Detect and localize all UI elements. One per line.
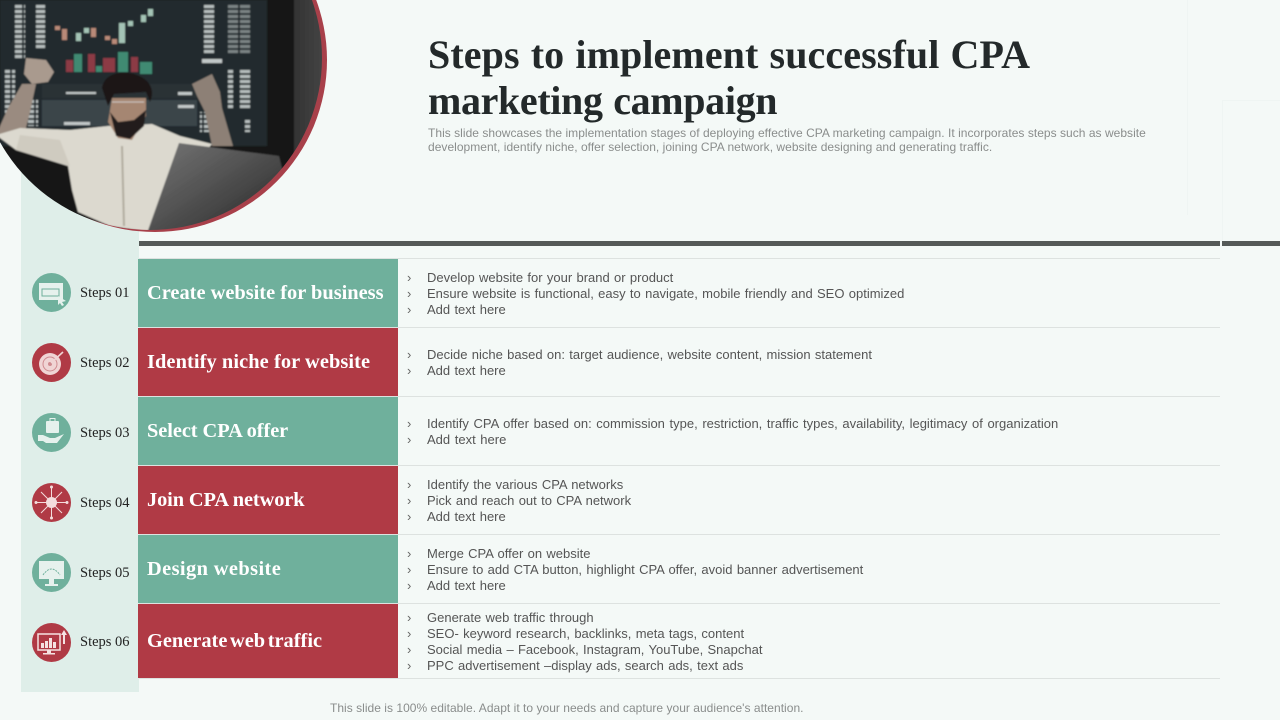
row 4 heading (138, 466, 398, 534)
row 3 bullets: Identify CPA offer based on: commission type, restriction, traffic types, availability, legitimacy of organization (427, 416, 1058, 431)
row 4 bullets: Pick and reach out to CPA network (427, 493, 631, 508)
icon: target (32, 343, 71, 382)
arms (0, 84, 36, 136)
subtitle description: development, identify niche, offer selection, joining CPA network, website designing and generating traffic. (428, 140, 992, 154)
row 5 bullets (408, 546, 864, 593)
title: marketing campaign (428, 78, 777, 122)
row 1 heading (138, 259, 398, 327)
photo: man celebrating in front of trading screens (0, 0, 327, 232)
subtitle description: This slide showcases the implementation stages of deploying effective CPA marketing campaign. It incorporates steps such as website (428, 126, 1146, 140)
row 1 bullets: Develop website for your brand or product (427, 270, 673, 285)
icon: traffic chart monitor (32, 623, 71, 662)
row 3 bullets: Add text here (427, 432, 506, 447)
row 2 heading: Identify niche for website (147, 350, 370, 372)
row 5: design website (139, 535, 1220, 604)
header rule right segment (1222, 241, 1280, 246)
row 3 bullets (408, 416, 1058, 447)
shirt (0, 124, 212, 232)
subtitle description (428, 126, 1146, 154)
row 2 bullets: Add text here (427, 363, 506, 378)
row 5 bullets: Ensure to add CTA button, highlight CPA offer, avoid banner advertisement (427, 562, 863, 577)
label: Steps 01: Steps 01 (80, 285, 130, 301)
row 1 bullets: Add text here (427, 302, 506, 317)
row 6 heading (138, 604, 398, 678)
header rule (139, 241, 1220, 246)
icon: website cursor (32, 273, 71, 312)
footer note: This slide is 100% editable. Adapt it to your needs and capture your audience's attention. (330, 701, 804, 715)
row 2 heading (138, 328, 398, 396)
row 4 heading: Join CPA network (147, 488, 304, 510)
label: Steps 06: Steps 06 (80, 634, 130, 650)
row 4: join network (139, 466, 1220, 535)
row 6: generate traffic (139, 604, 1220, 679)
title: Steps to implement successful CPA (428, 32, 1030, 77)
row 6 bullets: Social media – Facebook, Instagram, YouTube, Snapchat (427, 642, 762, 657)
row 3 heading: Select CPA offer (147, 420, 288, 442)
row 5 heading (138, 535, 398, 603)
row 1 bullets: Ensure website is functional, easy to navigate, mobile friendly and SEO optimized (427, 286, 904, 301)
row 4 bullets (408, 477, 632, 524)
row 4 bullets: Add text here (427, 509, 506, 524)
label: Steps 02: Steps 02 (80, 355, 130, 371)
row 4 bullets: Identify the various CPA networks (427, 477, 623, 492)
icon: hand with briefcase (32, 413, 71, 452)
row 6 bullets: Generate web traffic through (427, 610, 594, 625)
top row line (139, 258, 1220, 259)
row 5 heading: Design website (147, 558, 281, 580)
head (108, 98, 146, 140)
row 6 bullets (408, 610, 762, 673)
row 6 heading: Generate web traffic (147, 630, 322, 652)
row 6 bullets: PPC advertisement –display ads, search ads, text ads (427, 658, 743, 673)
row 3 heading (138, 397, 398, 465)
icon: monitor design (32, 553, 71, 592)
label: Steps 05: Steps 05 (80, 565, 130, 581)
label: Steps 03: Steps 03 (80, 425, 130, 441)
title (428, 32, 1030, 122)
row 6 bullets: SEO- keyword research, backlinks, meta tags, content (427, 626, 744, 641)
row 5 bullets: Add text here (427, 578, 506, 593)
row 3: select offer (139, 397, 1220, 466)
row 1: create website (139, 259, 1220, 328)
row 1 bullets (408, 270, 904, 317)
label: Steps 04: Steps 04 (80, 495, 130, 511)
row 2: identify niche (139, 328, 1220, 397)
row 2 bullets (408, 347, 872, 378)
laptop (146, 143, 285, 236)
sidebar panel (21, 170, 139, 692)
row 2 bullets: Decide niche based on: target audience, website content, mission statement (427, 347, 872, 362)
row 5 bullets: Merge CPA offer on website (427, 546, 590, 561)
icon: network hub (32, 483, 71, 522)
row 1 heading: Create website for business (147, 282, 384, 304)
